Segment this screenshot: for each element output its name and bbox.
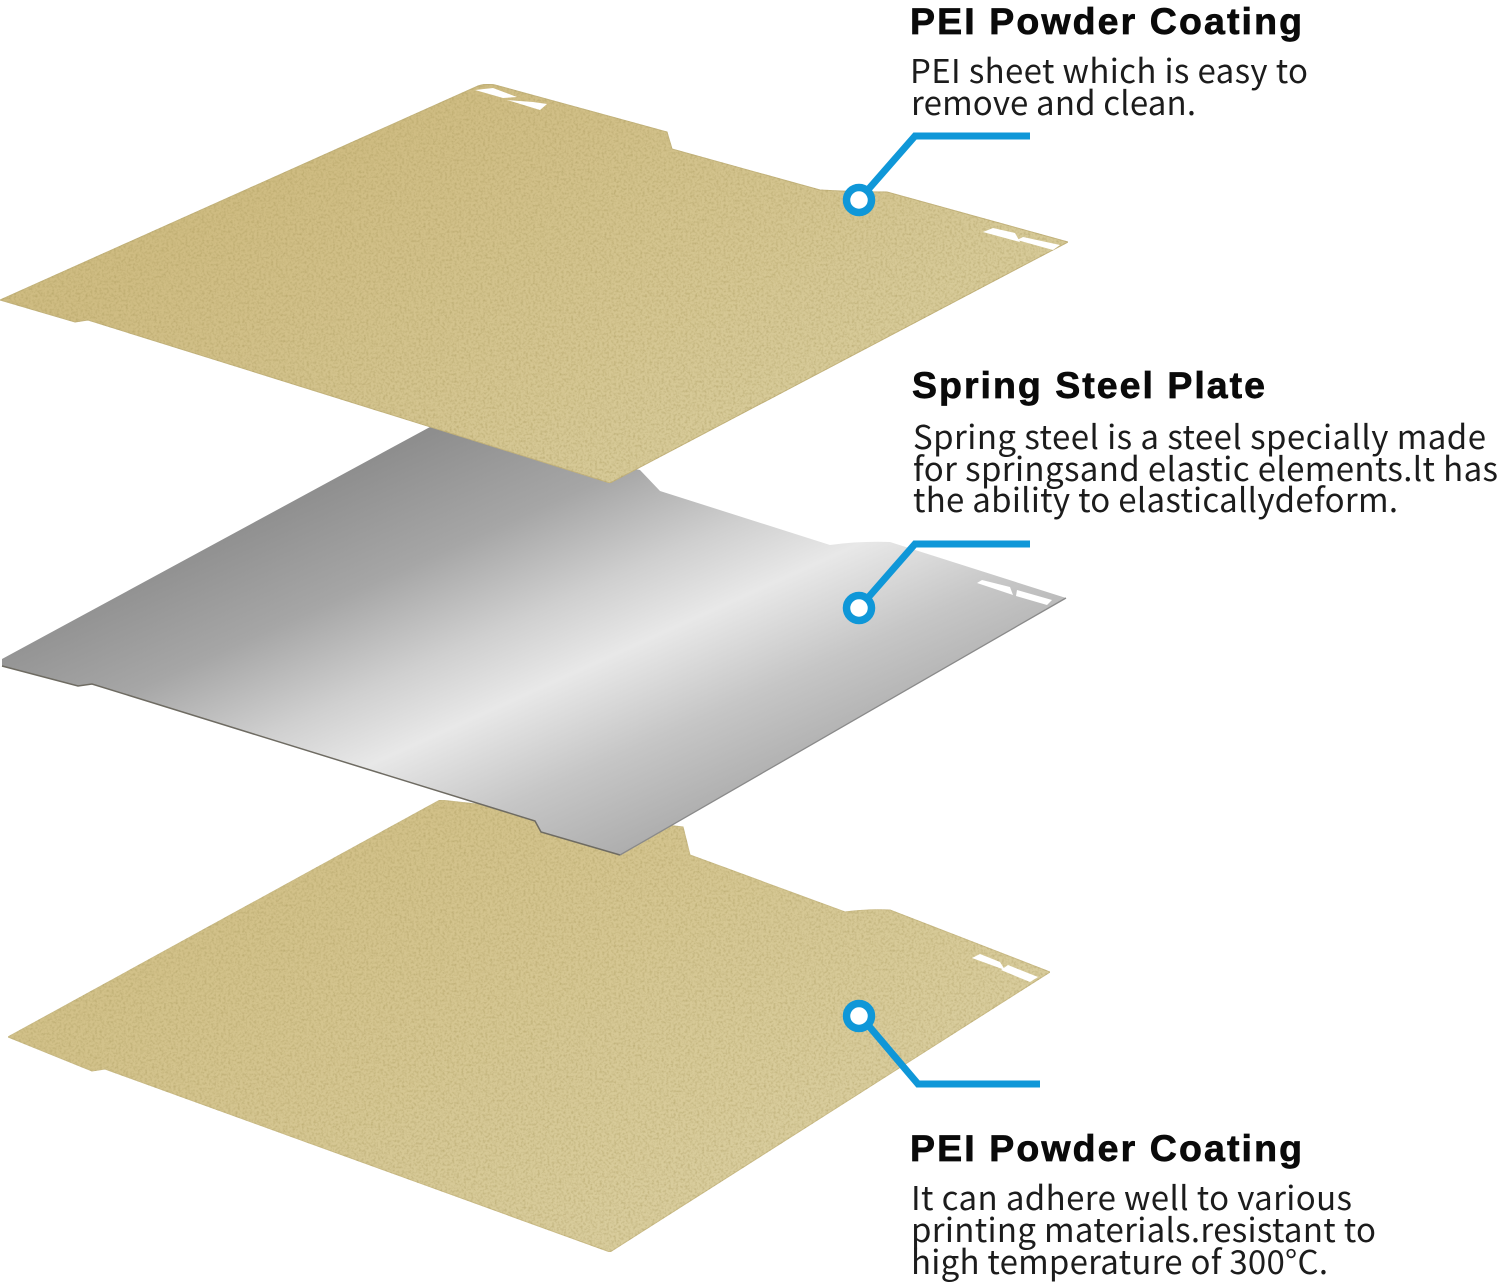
text: bottom PEI description <box>911 1172 1376 1284</box>
text: top PEI description <box>910 45 1308 125</box>
top PEI sheet <box>0 84 1068 483</box>
text: top PEI description: remove and clean. <box>911 77 1196 125</box>
text: bottom PEI description: It can adhere well to various <box>911 1172 1352 1220</box>
text: bottom PEI description: printing materials.resistant to <box>911 1204 1376 1252</box>
text: top PEI description: PEI sheet which is easy to <box>910 45 1308 93</box>
text: spring steel description: for springsand elastic elements.lt has <box>913 443 1498 491</box>
text: bottom PEI description: high temperature of 300°C. <box>911 1236 1328 1284</box>
spring steel plate <box>2 427 1066 855</box>
bottom PEI sheet <box>8 800 1050 1252</box>
heading: bottom PEI powder coating: PEI Powder Coating <box>910 1127 1302 1169</box>
text: spring steel description: the ability to elasticallydeform. <box>913 474 1398 522</box>
heading: top PEI powder coating: PEI Powder Coating <box>910 0 1302 42</box>
callout: spring steel pointer <box>846 544 1030 620</box>
callout: top PEI pointer <box>846 136 1030 212</box>
text: spring steel description <box>913 411 1498 522</box>
text: spring steel description: Spring steel is a steel specially made <box>913 411 1486 459</box>
heading: spring steel plate: Spring Steel Plate <box>912 364 1265 406</box>
callout: bottom PEI pointer <box>846 1004 1040 1084</box>
